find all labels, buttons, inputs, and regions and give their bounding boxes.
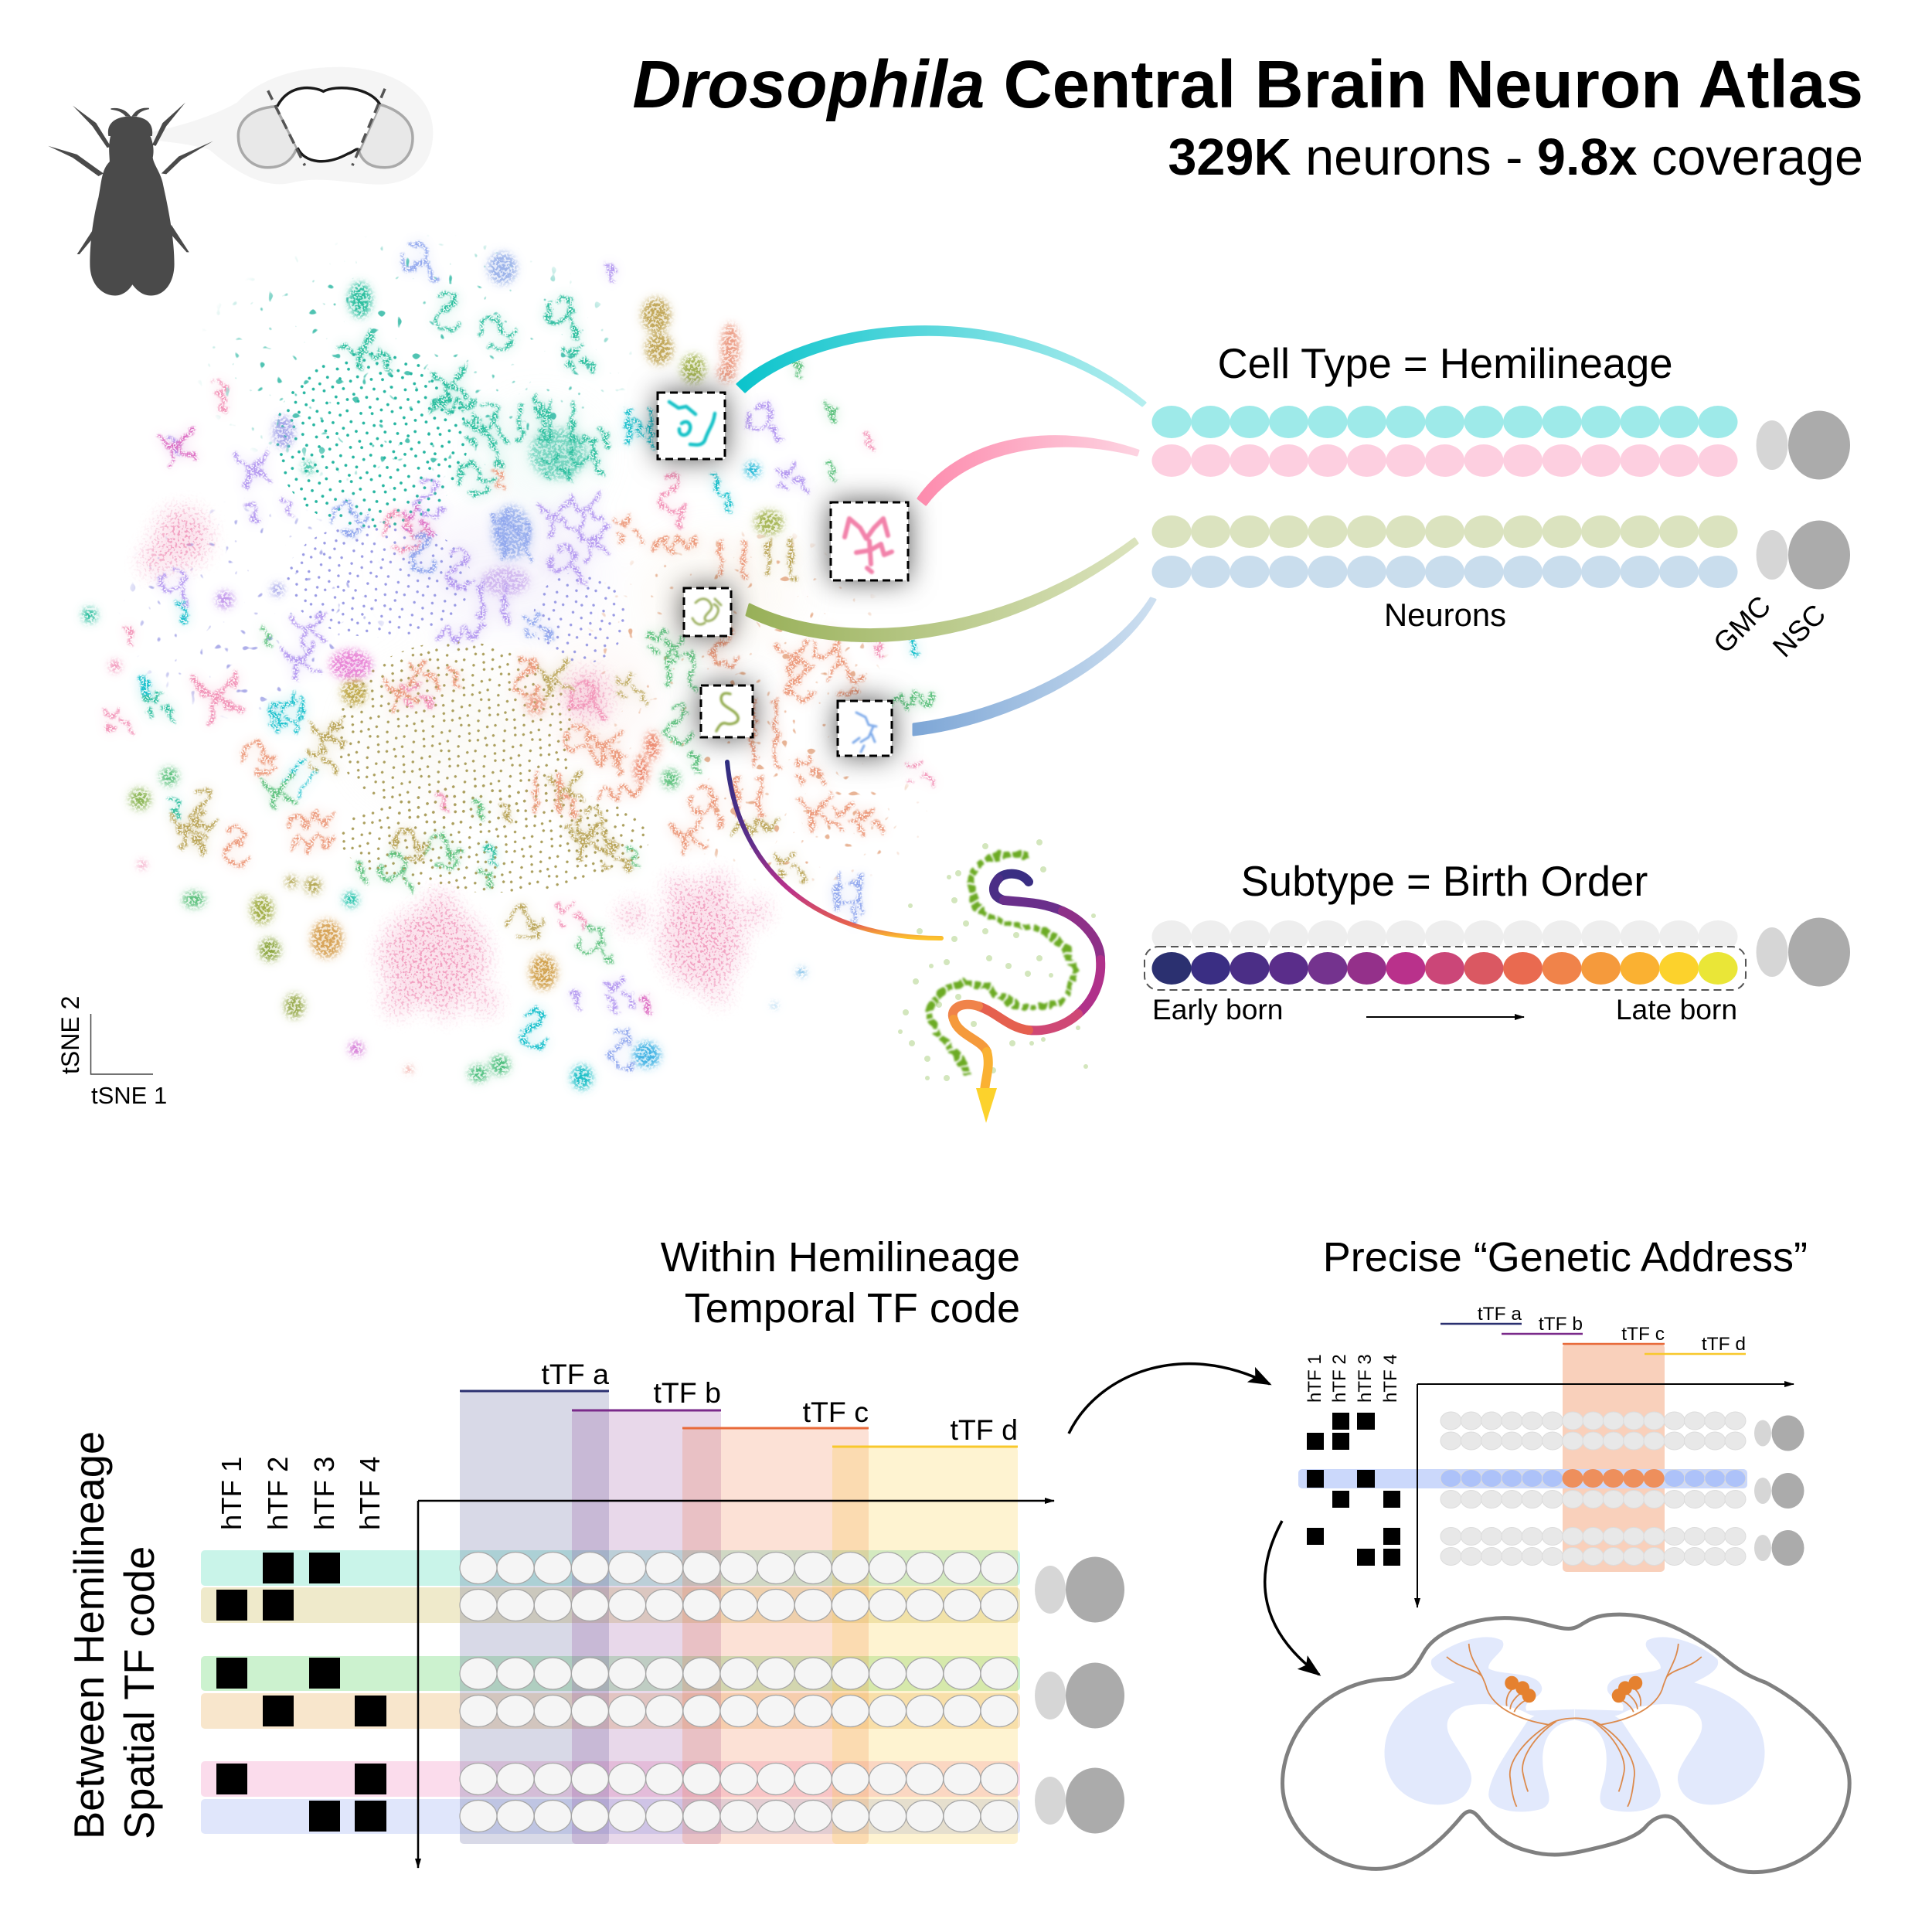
hTF labels [216,1457,386,1530]
vertical axis [1417,1384,1418,1607]
connector curve: blue [913,598,1155,735]
tTF b line [572,1410,721,1411]
vertical axis [417,1501,419,1868]
green clusters [261,361,934,964]
heading: between hemilineage: Between Hemilineage [66,1431,113,1839]
tTF d band [832,1447,1018,1844]
hTF labels: hTF 3 [308,1457,340,1530]
label: late born: Late born [1616,993,1737,1026]
tTF c label: tTF c [803,1396,869,1428]
tSNE 2 label: tSNE 2 [56,996,84,1074]
heading: precise genetic address: Precise “Genetic Address” [1323,1234,1808,1281]
cells [1440,1412,1746,1566]
zoom box: pink hemilineage [831,502,908,580]
progenitors pair 1 [1756,411,1850,479]
title: Drosophila Central Brain Neuron Atlas [632,46,1863,122]
hTF squares [216,1553,386,1832]
subtype close-up: green dots and S curve arrow [898,839,1100,1123]
teal clusters [145,294,608,866]
horizontal axis [1417,1383,1794,1385]
zoom box: blue hemilineage [838,701,892,756]
magenta accents [159,430,651,1014]
pink clouds [142,509,767,1017]
hTF labels: hTF 2 [1329,1354,1350,1403]
curved arrow to brain [1265,1521,1319,1675]
tTF labels: tTF c [1621,1324,1665,1345]
tSNE 1 label: tSNE 1 [91,1082,167,1109]
pale scatter dots [898,839,1096,1081]
tTF a line [460,1389,609,1393]
diagram: central brain with labelled neurons [1283,1614,1849,1872]
zoom box: cyan hemilineage [658,393,725,459]
tSNE axes [56,996,167,1109]
coloured clouds [83,253,805,1089]
label: GMC: GMC [1707,590,1777,659]
hTF labels: hTF 1 [1304,1354,1325,1403]
icon: fly silhouette with brain inset [48,67,433,295]
hTF labels: hTF 1 [216,1457,247,1530]
hTF labels: hTF 2 [262,1457,294,1530]
tTF lines [1440,1324,1746,1354]
curved arrow to genetic address [1069,1364,1270,1434]
tTF d label: tTF d [950,1413,1018,1446]
highlighted tTF c band [1563,1344,1665,1572]
arrow: birth order direction [1366,1016,1524,1018]
tTF labels: tTF a [1478,1304,1522,1325]
tTF b label: tTF b [653,1376,721,1409]
matrix: spatial and temporal TF code [201,1358,1124,1868]
hTF labels: hTF 4 [1380,1354,1401,1403]
hTF labels: hTF 4 [354,1457,386,1530]
label: NSC: NSC [1767,598,1832,663]
gradient S arrow [953,874,1100,1091]
tTF labels: tTF b [1539,1314,1583,1335]
spatial hemilineage bars [201,1550,1020,1834]
neuron rows: hemilineages [1151,406,1737,588]
zoom box: green hemilineage [684,588,731,636]
heading: subtype: Subtype = Birth Order [1241,858,1648,905]
progenitors pair 2 [1756,521,1850,589]
subtitle: 329K neurons - 9.8x coverage [1168,129,1863,186]
progenitors [1754,1416,1804,1566]
cyan clusters [140,408,917,1048]
tTF b band [572,1410,721,1844]
progenitors [1035,1556,1124,1833]
sparse dot fields [274,352,649,893]
label: neurons: Neurons [1384,597,1506,633]
horizontal axis [418,1500,1054,1502]
salmon and orange clusters [225,471,883,865]
orange overlay cells [1563,1469,1665,1488]
chart: tSNE neuron atlas [83,232,935,1089]
heading: within hemilineage: Within Hemilineage [661,1234,1020,1281]
connector curve: birth order [727,762,941,938]
heading: spatial TF code: Spatial TF code [116,1546,163,1839]
brain outline [1283,1614,1849,1872]
fly body [48,103,213,295]
arrow head [976,1088,997,1123]
brain inset speech bubble [151,67,433,185]
orange cell bodies [1505,1676,1642,1702]
tTF labels [1478,1304,1746,1355]
pink clusters [104,381,934,928]
hTF squares [1307,1413,1400,1566]
genetic address mini matrix [1298,1304,1804,1607]
heading: cell type: Cell Type = Hemilineage [1217,340,1673,387]
connector curve: pink [918,437,1138,505]
tTF d line [832,1445,1018,1448]
background haze [355,410,796,804]
connector curve: green [747,539,1138,641]
neuron cells rows [460,1552,1018,1832]
tTF c line [682,1427,869,1430]
blue clusters [332,243,872,1068]
tTF c band [682,1428,869,1844]
neuropil regions [1385,1637,1765,1811]
orange neuron projections [1447,1644,1702,1807]
wide scatter of dots [116,232,935,889]
purple clusters [159,264,806,1014]
tTF labels: tTF d [1702,1334,1746,1355]
highlighted row bar [1298,1469,1747,1488]
grey upper row [1151,920,1737,953]
hTF labels [1304,1354,1401,1403]
connector curve: cyan [737,327,1145,406]
heading: temporal TF code: Temporal TF code [685,1285,1020,1332]
label: early born: Early born [1152,993,1283,1026]
birth order row [1145,947,1746,990]
tTF a band [460,1391,609,1844]
olive clusters [172,540,804,939]
green neuron path [930,855,1073,1078]
zoom box: subtype S cluster [701,685,753,737]
progenitors pair 3 [1756,918,1850,986]
tTF a label: tTF a [541,1358,609,1390]
brain outline small [238,88,413,168]
hTF labels: hTF 3 [1355,1354,1376,1403]
